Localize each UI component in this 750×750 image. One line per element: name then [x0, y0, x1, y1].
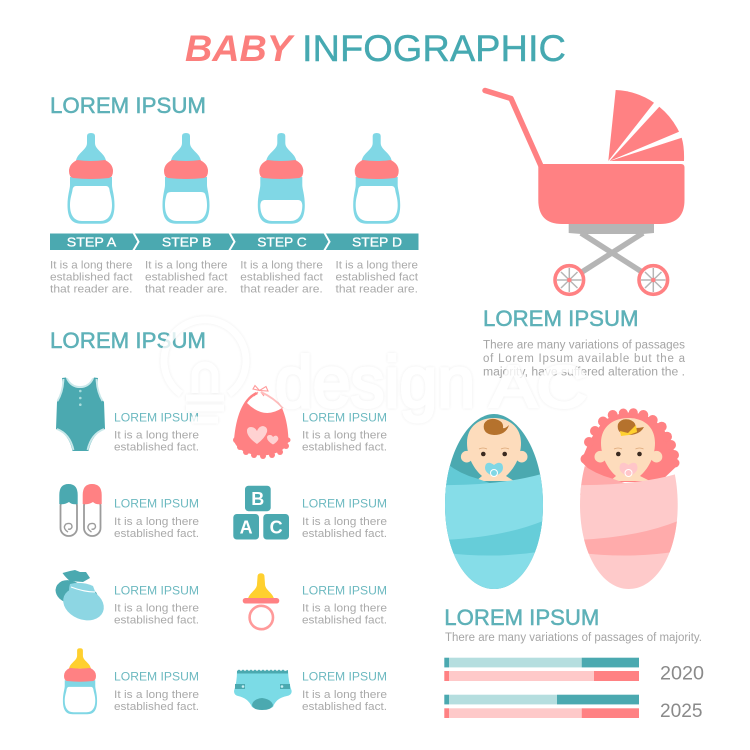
item text: It is a long there [302, 430, 387, 442]
icon: onesie [56, 378, 105, 451]
text: step C: established fact [240, 271, 323, 283]
heading: steps: LOREM IPSUM [50, 93, 206, 118]
icon: bottle C [258, 133, 305, 224]
item text [302, 670, 387, 713]
item text: It is a long there [302, 689, 387, 701]
title [185, 28, 566, 69]
heading: stroller: LOREM IPSUM [483, 306, 638, 331]
item text: established fact. [302, 701, 387, 713]
icon: booties [56, 570, 109, 626]
text: step D [336, 259, 418, 295]
item text [114, 670, 199, 713]
icon: bottle B [162, 133, 210, 224]
watermark text: design [275, 343, 475, 423]
item text: established fact. [302, 614, 387, 626]
item text: LOREM IPSUM [302, 584, 387, 598]
panel: feeding steps [50, 93, 418, 295]
item text: established fact. [114, 614, 199, 626]
item text: LOREM IPSUM [114, 584, 199, 598]
illustration: baby girl [580, 408, 680, 589]
paragraph: majority, have suffered alteration the . [483, 366, 685, 378]
item text: LOREM IPSUM [302, 497, 387, 511]
item text: established fact. [302, 528, 387, 540]
text: step B [145, 259, 228, 295]
paragraph: There are many variations of passages [483, 339, 685, 351]
heading: items: LOREM IPSUM [50, 328, 206, 353]
item text [302, 497, 387, 540]
icon: safety pins [59, 484, 102, 536]
step arrow bar: STEP C [257, 234, 307, 250]
panel: clothing and items [50, 328, 387, 714]
paragraph [483, 339, 686, 378]
heading: bars: LOREM IPSUM [444, 605, 599, 630]
text: step C [240, 259, 323, 295]
icon: alphabet blocks: A [240, 518, 253, 538]
step arrow bar: STEP B [162, 234, 211, 250]
item text: LOREM IPSUM [302, 670, 387, 684]
bar group 2025 [444, 695, 639, 718]
bar group 2020 [444, 658, 639, 681]
icon: right wheel [639, 266, 668, 294]
text: step D: established fact [336, 271, 418, 283]
text: step D: It is a long there [336, 259, 418, 271]
watermark text: AC [490, 355, 587, 420]
illustration: baby boy [445, 414, 543, 589]
title: BABY [185, 28, 295, 69]
icon: alphabet blocks [233, 486, 289, 540]
item text: LOREM IPSUM [302, 410, 387, 424]
item text [114, 410, 199, 454]
text: step B: It is a long there [145, 259, 228, 271]
item text: established fact. [114, 442, 199, 454]
watermark text [275, 343, 587, 423]
icon: alphabet blocks: B [251, 489, 264, 509]
item text: It is a long there [302, 516, 387, 528]
text: step A: established fact [50, 271, 132, 283]
item text: established fact. [114, 528, 199, 540]
text: step D: that reader are. [336, 283, 418, 295]
icon: stroller [485, 90, 684, 294]
item text: It is a long there [114, 689, 199, 701]
panel: stroller text [483, 306, 686, 378]
step arrow bar [50, 232, 418, 251]
watermark bulb icon [164, 320, 246, 420]
title: INFOGRAPHIC [302, 28, 566, 69]
icon: bottle A [68, 133, 114, 224]
item text: It is a long there [114, 516, 199, 528]
step arrow bar: STEP D [352, 234, 402, 250]
text: step C: It is a long there [240, 259, 323, 271]
text: step B: that reader are. [145, 283, 228, 295]
item text: LOREM IPSUM [114, 670, 199, 684]
icon: left wheel [555, 266, 584, 294]
icon: bib [233, 386, 290, 459]
item text: established fact. [114, 701, 199, 713]
icon: pacifier [243, 573, 279, 629]
text: step A: It is a long there [50, 259, 132, 271]
item text: It is a long there [302, 603, 387, 615]
icon: small bottle [63, 648, 97, 714]
text: step C: that reader are. [240, 283, 323, 295]
text: step A [50, 259, 132, 295]
panel: comparison bars [444, 605, 704, 722]
item text [302, 584, 387, 626]
label 2025: 2025 [660, 701, 702, 722]
text: step B: established fact [145, 271, 228, 283]
watermark [164, 320, 587, 423]
item text: It is a long there [114, 603, 199, 615]
step arrow bar: STEP A [67, 234, 117, 250]
blue swaddle wrap [445, 466, 543, 589]
item text: established fact. [302, 442, 387, 454]
icon: bottle D [353, 133, 400, 224]
text: step A: that reader are. [50, 283, 132, 295]
item text [302, 410, 387, 454]
subtitle: There are many variations of passages of majority. [445, 632, 702, 644]
item text: LOREM IPSUM [114, 497, 199, 511]
item text [114, 584, 199, 626]
item text: LOREM IPSUM [114, 410, 199, 424]
label 2020: 2020 [660, 664, 704, 684]
item text [114, 497, 199, 540]
icon: diaper [234, 670, 292, 710]
pink swaddle wrap [580, 466, 678, 589]
paragraph: of Lorem Ipsum available but the a [483, 353, 686, 365]
icon: alphabet blocks: C [270, 518, 283, 538]
item text: It is a long there [114, 430, 199, 442]
